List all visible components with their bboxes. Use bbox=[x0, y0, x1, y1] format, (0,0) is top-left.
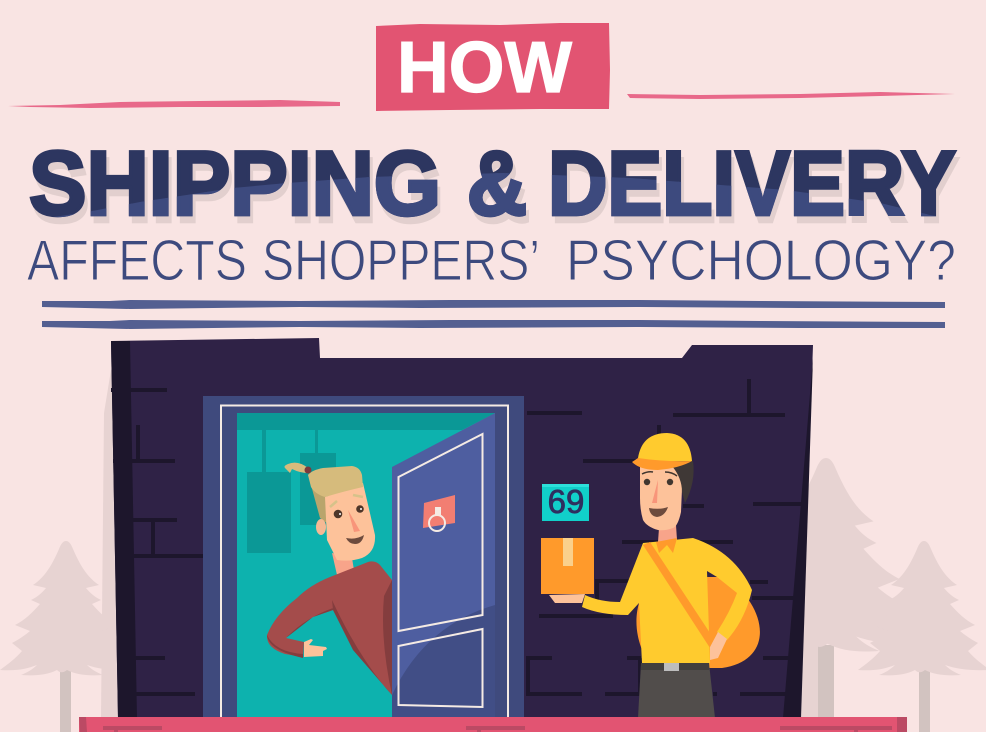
left pink brush stroke bbox=[8, 100, 340, 108]
hip hand bbox=[710, 632, 727, 660]
tree: large behind left wall bbox=[101, 370, 120, 717]
collar bbox=[656, 538, 677, 553]
title lower tone: SHIPPING bbox=[29, 133, 441, 234]
title shadow: & bbox=[470, 140, 530, 241]
hair bbox=[672, 461, 694, 503]
blue brush lines bbox=[42, 300, 945, 329]
delivery man bbox=[541, 433, 760, 718]
buckle bbox=[664, 663, 679, 671]
mouth bbox=[346, 535, 364, 544]
hand bbox=[304, 639, 327, 657]
open door bbox=[392, 413, 495, 718]
cap bbox=[632, 433, 692, 470]
ear bbox=[316, 519, 326, 535]
face bbox=[325, 483, 375, 561]
belt bbox=[641, 663, 709, 670]
badge: HOW bbox=[376, 23, 610, 111]
sweater shadows bbox=[267, 580, 392, 695]
pants bbox=[638, 663, 715, 718]
sack bbox=[636, 577, 760, 668]
hair top bbox=[308, 466, 363, 497]
title shadow: SHIPPING bbox=[32, 140, 444, 241]
head bbox=[640, 465, 683, 530]
customer peeking from door bbox=[267, 463, 392, 695]
shirt bbox=[582, 538, 752, 663]
nose bbox=[348, 510, 360, 532]
tree: large right bbox=[731, 458, 921, 718]
sweater bbox=[267, 561, 392, 695]
eyebrows bbox=[330, 495, 363, 507]
door knocker bbox=[423, 495, 455, 531]
neck bbox=[658, 525, 677, 542]
title lower tone: & bbox=[467, 133, 527, 234]
title: SHIPPING & DELIVERY: SHIPPING bbox=[29, 133, 441, 234]
title: SHIPPING & DELIVERY bbox=[29, 133, 956, 234]
eyes bbox=[334, 505, 364, 518]
subtitle: AFFECTS bbox=[27, 229, 247, 293]
face details bbox=[642, 472, 677, 517]
tree: small right bbox=[858, 541, 986, 732]
neck bbox=[332, 553, 354, 575]
palm bbox=[549, 594, 585, 603]
subtitle: SHOPPERS’ bbox=[262, 229, 540, 293]
strap bbox=[643, 542, 710, 648]
house number 69: 69 bbox=[548, 483, 584, 520]
title shadow bbox=[32, 140, 959, 241]
floor ledge bbox=[79, 717, 907, 732]
subtitle bbox=[27, 229, 956, 293]
hair back bbox=[311, 485, 328, 524]
badge: HOW: HOW bbox=[397, 28, 572, 108]
brick wall bbox=[111, 338, 813, 718]
title: SHIPPING & DELIVERY: & bbox=[467, 133, 527, 234]
title lower tone bbox=[53, 173, 936, 218]
hair band bbox=[304, 466, 312, 474]
parcel bbox=[541, 538, 594, 594]
tree: small left bbox=[0, 541, 132, 732]
doorway bbox=[203, 396, 524, 718]
right pink brush stroke bbox=[627, 92, 955, 99]
hanging coats bbox=[247, 430, 336, 553]
ponytail bbox=[284, 463, 308, 473]
